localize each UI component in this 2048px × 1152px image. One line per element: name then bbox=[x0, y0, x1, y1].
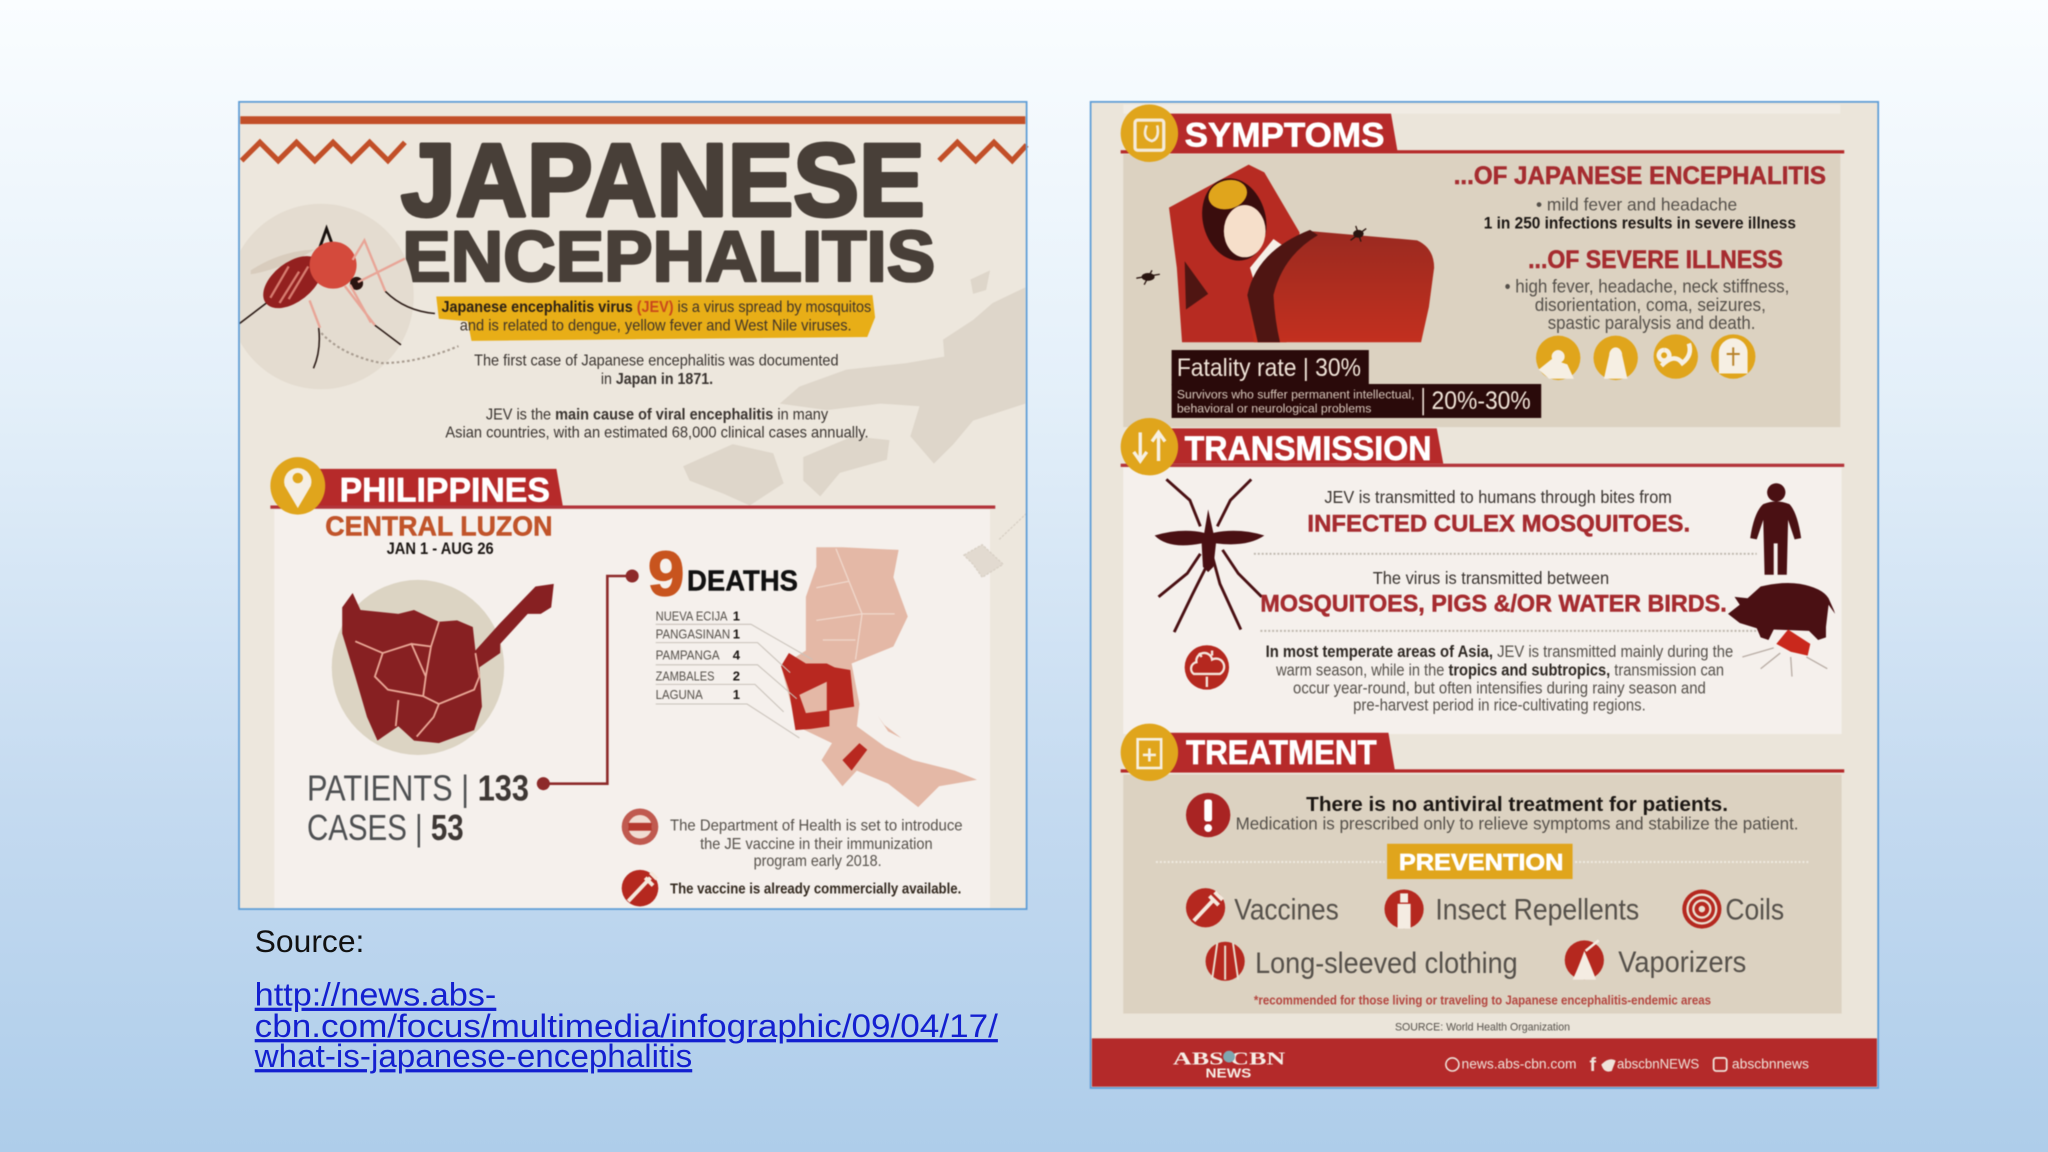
title: ENCEPHALITIS bbox=[402, 217, 935, 297]
faint mosquito bbox=[964, 513, 1027, 577]
text: mild symptoms bbox=[1484, 194, 1796, 233]
prevention: coils: Coils bbox=[1725, 894, 1784, 927]
section: symptoms bbox=[1121, 104, 1844, 427]
text: seasonal transmission: occur year-round, but often intensifies during rainy season and bbox=[1293, 680, 1706, 698]
text: no antiviral treatment bbox=[1236, 794, 1799, 833]
prevention: long-sleeved clothing: Long-sleeved clothing bbox=[1255, 947, 1518, 980]
title bbox=[401, 123, 935, 297]
panel: symptoms, transmission, treatment bbox=[1091, 102, 1878, 1088]
source note: SOURCE: World Health Organization bbox=[1395, 1022, 1570, 1034]
stats: patients and cases: CASES | 53 bbox=[307, 807, 464, 848]
social links: f bbox=[1590, 1054, 1597, 1076]
heading: Philippines bbox=[270, 457, 995, 515]
table: deaths by province: PAMPANGA bbox=[656, 648, 720, 663]
title: JAPANESE bbox=[401, 123, 925, 238]
heading: 9 deaths bbox=[648, 540, 798, 610]
text: first case bbox=[474, 353, 839, 388]
text: seasonal transmission: In most temperate areas of Asia, JEV is transmitted mainly during the bbox=[1266, 643, 1733, 661]
source link bbox=[254, 976, 999, 1074]
table: deaths by province: 4 bbox=[733, 648, 741, 663]
source citation bbox=[254, 924, 999, 1074]
icon: warning bbox=[1186, 793, 1230, 837]
emphasis: infected culex mosquitoes: INFECTED CULEX MOSQUITOES. bbox=[1307, 511, 1690, 538]
table: deaths by province bbox=[656, 608, 812, 738]
heading: Philippines: PHILIPPINES bbox=[340, 472, 550, 510]
text: DOH vaccine plan: the JE vaccine in their immunization bbox=[700, 836, 933, 853]
prevention: long-sleeved clothing bbox=[1206, 942, 1518, 981]
badge: prevention: PREVENTION bbox=[1399, 849, 1563, 875]
icon: mosquito in circle bbox=[239, 204, 458, 389]
text: severe symptoms bbox=[1505, 276, 1789, 333]
footnote: *recommended for those living or traveling to Japanese encephalitis-endemic areas bbox=[1254, 992, 1711, 1007]
icon: human bbox=[1750, 483, 1801, 575]
icon: weather bbox=[1185, 645, 1229, 690]
icons: symptom pictograms bbox=[1536, 334, 1755, 380]
text: main cause: Asian countries, with an estimated 68,000 clinical cases annually. bbox=[445, 425, 869, 442]
text: no antiviral treatment: There is no antiviral treatment for patients. bbox=[1306, 794, 1728, 816]
heading: symptoms bbox=[1121, 104, 1844, 162]
stat: survivors bbox=[1172, 384, 1541, 418]
table: deaths by province: PANGASINAN bbox=[656, 627, 730, 642]
subheading: Central Luzon: CENTRAL LUZON bbox=[325, 511, 552, 542]
text: vaccine available: The vaccine is already commercially available. bbox=[670, 880, 961, 897]
zigzag right bbox=[939, 142, 1027, 161]
text: main cause bbox=[445, 406, 869, 442]
stats: patients and cases: PATIENTS | 133 bbox=[307, 768, 529, 809]
footer bar bbox=[1092, 1038, 1877, 1087]
text: main cause: JEV is the main cause of viral encephalitis in many bbox=[486, 406, 828, 423]
connector arrow bbox=[537, 569, 639, 790]
table: deaths by province: 2 bbox=[733, 668, 740, 683]
text: first case: in Japan in 1871. bbox=[601, 371, 713, 388]
badge: prevention bbox=[1387, 844, 1573, 879]
prevention: insect repellents: Insect Repellents bbox=[1435, 894, 1639, 927]
source link: cbn.com/focus/multimedia/infographic/09/04/17/ bbox=[255, 1007, 999, 1044]
date range: JAN 1 - AUG 26 bbox=[387, 540, 494, 558]
emphasis: mosquitoes, pigs and water birds: MOSQUITOES, PIGS &/OR WATER BIRDS. bbox=[1260, 590, 1727, 617]
text: mild symptoms: • mild fever and headache bbox=[1536, 194, 1737, 214]
icon: syringe bbox=[622, 870, 658, 906]
table: deaths by province: 1 bbox=[733, 687, 740, 702]
text: severe symptoms: • high fever, headache, neck stiffness, bbox=[1505, 276, 1789, 297]
text: DOH vaccine plan: The Department of Health is set to introduce bbox=[670, 818, 963, 835]
callout: virus definition bbox=[436, 295, 875, 341]
text: seasonal transmission bbox=[1266, 643, 1733, 715]
text: transmitted between: The virus is transmitted between bbox=[1373, 568, 1609, 588]
map: Central Luzon bbox=[332, 580, 554, 755]
text: severe symptoms: spastic paralysis and death. bbox=[1548, 312, 1755, 333]
stat: fatality rate: Fatality rate | 30% bbox=[1177, 355, 1361, 382]
stat: survivors: Survivors who suffer permanent intellectual, bbox=[1177, 387, 1415, 401]
logo: ABS-CBN News bbox=[1173, 1048, 1285, 1081]
social links: abscbnNEWS bbox=[1617, 1056, 1699, 1071]
text: no antiviral treatment: Medication is prescribed only to relieve symptoms and stabilize the patient. bbox=[1236, 813, 1799, 833]
text: DOH vaccine plan: program early 2018. bbox=[754, 853, 882, 870]
source citation: Source: bbox=[255, 924, 364, 959]
illustration: patient in bed bbox=[1136, 165, 1434, 342]
stats: patients and cases bbox=[307, 768, 529, 848]
prevention: coils bbox=[1682, 889, 1784, 929]
text: severe symptoms: disorientation, coma, seizures, bbox=[1535, 294, 1766, 315]
heading: transmission bbox=[1121, 418, 1844, 475]
prevention: vaccines bbox=[1186, 888, 1339, 927]
section: transmission bbox=[1121, 418, 1844, 734]
table: deaths by province: 1 bbox=[733, 608, 740, 623]
table: deaths by province: NUEVA ECIJA bbox=[656, 608, 728, 623]
table: deaths by province: LAGUNA bbox=[656, 687, 703, 702]
prevention: vaporizers bbox=[1565, 940, 1746, 980]
panel: Philippines data area bbox=[274, 509, 990, 909]
prevention: insect repellents bbox=[1384, 889, 1639, 929]
text: seasonal transmission: warm season, while in the tropics and subtropics, transmission can bbox=[1275, 661, 1724, 679]
text: bites: JEV is transmitted to humans through bites from bbox=[1324, 487, 1672, 507]
map: Luzon bbox=[781, 547, 977, 807]
social links: abscbnnews bbox=[1732, 1056, 1809, 1071]
text: first case: The first case of Japanese encephalitis was documented bbox=[474, 353, 839, 370]
callout: virus definition: Japanese encephalitis virus (JEV) is a virus spread by mosquitos bbox=[441, 299, 871, 316]
stat: survivors: behavioral or neurological problems bbox=[1177, 402, 1371, 416]
icon: Department of Health seal bbox=[622, 808, 658, 845]
source link: http://news.abs- bbox=[255, 976, 496, 1013]
heading: 9 deaths: DEATHS bbox=[687, 565, 798, 597]
icon: dark mosquito bbox=[1155, 479, 1264, 632]
heading: transmission: TRANSMISSION bbox=[1185, 430, 1432, 468]
social links: news.abs-cbn.com bbox=[1462, 1056, 1576, 1071]
table: deaths by province: ZAMBALES bbox=[656, 668, 715, 683]
icon: small red mosquito bbox=[1742, 630, 1827, 677]
social links bbox=[1446, 1054, 1809, 1076]
top rule bbox=[240, 116, 1025, 124]
text: mild symptoms: 1 in 250 infections results in severe illness bbox=[1484, 215, 1796, 233]
source link: what-is-japanese-encephalitis bbox=[254, 1037, 692, 1074]
prevention: vaccines: Vaccines bbox=[1234, 894, 1339, 927]
icon: pig bbox=[1728, 583, 1835, 640]
faint map of Japan bbox=[683, 270, 1025, 505]
heading: symptoms: SYMPTOMS bbox=[1185, 116, 1384, 154]
heading: of Japanese encephalitis: ...OF JAPANESE ENCEPHALITIS bbox=[1454, 163, 1826, 190]
heading: of severe illness: ...OF SEVERE ILLNESS bbox=[1528, 247, 1783, 274]
panel: Japanese encephalitis overview bbox=[239, 102, 1027, 909]
panel border bbox=[239, 102, 1027, 909]
heading: treatment bbox=[1121, 724, 1844, 781]
stat: survivors: 20%-30% bbox=[1432, 388, 1531, 415]
zigzag left bbox=[242, 142, 405, 161]
panel border right bbox=[1091, 102, 1878, 1088]
text: seasonal transmission: pre-harvest period in rice-cultivating regions. bbox=[1353, 697, 1646, 715]
logo: ABS-CBN News: ABS CBN bbox=[1173, 1048, 1285, 1068]
logo: ABS-CBN News: NEWS bbox=[1206, 1066, 1252, 1081]
prevention: vaporizers: Vaporizers bbox=[1618, 946, 1746, 979]
heading: treatment: TREATMENT bbox=[1186, 734, 1377, 772]
text: DOH vaccine plan bbox=[670, 818, 963, 870]
section: treatment bbox=[1121, 724, 1844, 1014]
callout: virus definition: and is related to dengue, yellow fever and West Nile viruses. bbox=[460, 317, 852, 334]
heading: 9 deaths: 9 bbox=[648, 540, 684, 610]
table: deaths by province: 1 bbox=[733, 627, 740, 642]
